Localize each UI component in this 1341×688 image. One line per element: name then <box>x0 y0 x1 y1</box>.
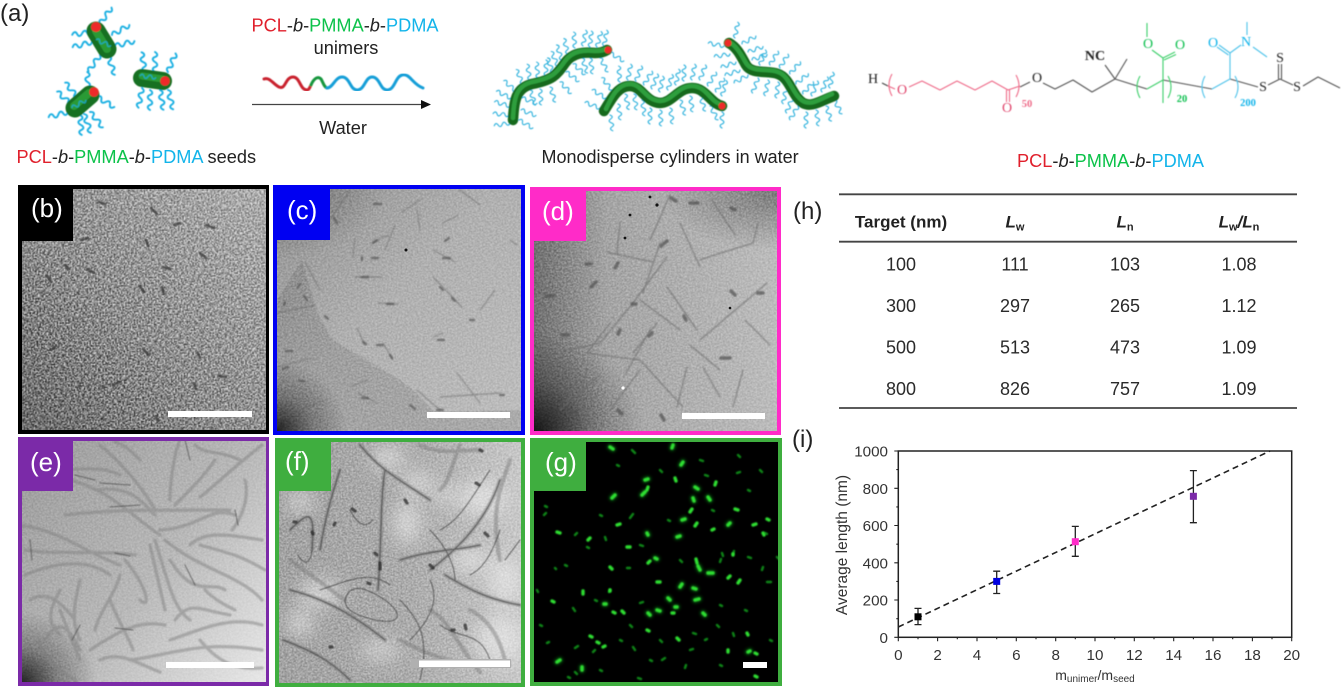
x axis labels: 6 <box>1012 647 1021 664</box>
chemical structure: 20 <box>1177 94 1187 105</box>
y axis labels <box>854 444 888 647</box>
y axis title: Average length (nm) <box>834 475 851 615</box>
table header: Target (nm) <box>855 212 947 232</box>
table header: n <box>1253 222 1260 234</box>
table rows: 265 <box>1110 296 1140 316</box>
text: monodisperse cylinders: Monodisperse cylinders in water <box>542 147 799 167</box>
label tab (g): (g) <box>545 447 577 477</box>
label tab (g) <box>530 438 586 491</box>
table header: /L <box>1237 212 1253 232</box>
chemical structure: NC <box>1085 49 1105 64</box>
icon: unimer chain <box>264 75 423 90</box>
text: polymer name: PCL-b-PMMA-b-PDMA <box>1017 151 1205 171</box>
table rows: 513 <box>1000 338 1030 358</box>
chart: average length vs mass ratio <box>834 444 1300 685</box>
x axis labels <box>894 647 1300 664</box>
x axis labels: 14 <box>1165 647 1182 664</box>
panel: (g) confocal fluorescence image <box>530 438 782 686</box>
chemical structure: O <box>1032 71 1042 86</box>
panel: (b) TEM seeds <box>18 185 269 434</box>
y axis labels: 1000 <box>854 444 888 460</box>
x axis labels: 4 <box>973 647 981 664</box>
panel label (a): (a) <box>0 0 29 27</box>
table rows: 1.09 <box>1221 338 1257 358</box>
table rows: 500 <box>886 338 916 358</box>
table rows: 826 <box>1000 379 1030 399</box>
chemical structure: N <box>1241 35 1251 50</box>
x axis labels: 2 <box>933 647 942 664</box>
table rows: 1.09 <box>1221 379 1257 399</box>
table header: L <box>1116 212 1127 232</box>
y axis labels: 400 <box>863 555 888 572</box>
label tab (d) <box>530 187 586 241</box>
chemical structure: S <box>1259 80 1267 95</box>
chemical structure: 50 <box>1022 99 1032 110</box>
chemical structure: O <box>1002 101 1012 116</box>
label tab (f): (f) <box>285 446 310 476</box>
label tab (b) <box>18 185 73 241</box>
table: lengths and dispersity <box>839 194 1297 408</box>
panel: (c) TEM 100 nm cylinders <box>273 185 525 435</box>
x axis labels: 18 <box>1244 647 1261 664</box>
table rows: 300 <box>886 296 916 316</box>
table rows: 100 <box>886 255 916 275</box>
table rows: 103 <box>1110 255 1140 275</box>
y axis labels: 800 <box>863 481 888 498</box>
x axis title: seed <box>1113 674 1135 685</box>
chemical structure: S <box>1293 80 1301 95</box>
x axis labels: 16 <box>1205 647 1221 664</box>
label tab (c) <box>273 185 330 240</box>
table header: w <box>1228 222 1238 234</box>
label tab (e): (e) <box>30 447 62 477</box>
table header: n <box>1127 222 1134 234</box>
x axis labels: 10 <box>1087 647 1103 664</box>
table header: w <box>1015 222 1025 234</box>
trend line <box>898 451 1270 627</box>
chemical structure: O <box>1208 36 1218 51</box>
x axis labels: 20 <box>1283 647 1300 664</box>
chemical structure: S <box>1276 51 1284 66</box>
scale bar <box>427 412 510 418</box>
table rows: 1.08 <box>1221 255 1257 275</box>
label tab (b): (b) <box>31 193 63 223</box>
x axis labels: 12 <box>1126 647 1143 664</box>
label tab (c): (c) <box>287 195 317 225</box>
scale bar <box>743 662 767 668</box>
x axis labels: 8 <box>1051 647 1060 664</box>
scale bar <box>682 413 765 419</box>
arrow: water <box>252 100 431 109</box>
scale bar <box>168 411 252 417</box>
table rows: 297 <box>1000 296 1030 316</box>
scale bar <box>411 659 511 668</box>
table rows: 800 <box>886 379 916 399</box>
y axis labels: 600 <box>863 518 888 535</box>
table rows: 1.12 <box>1221 296 1257 316</box>
icon: seed micelles <box>48 6 178 135</box>
chemical structure: O <box>1143 37 1153 52</box>
table header: L <box>1006 212 1016 232</box>
chemical structure: 200 <box>1240 98 1256 109</box>
text: seeds label: PCL-b-PMMA-b-PDMA seeds <box>16 147 256 167</box>
scale bar <box>166 662 254 668</box>
table rows: 757 <box>1110 379 1140 399</box>
table rows <box>886 255 1257 399</box>
panel label (i): (i) <box>792 426 813 453</box>
chemical structure: O <box>1175 38 1185 53</box>
x axis labels: 0 <box>894 647 903 664</box>
panel: (d) TEM 300 nm cylinders <box>530 187 781 435</box>
data points <box>914 493 1197 620</box>
y axis labels: 0 <box>880 630 888 647</box>
x axis title: /m <box>1098 667 1113 683</box>
x axis title: unimer <box>1067 674 1098 685</box>
chemical structure: O <box>897 83 907 98</box>
text: unimers label: unimers <box>314 38 378 58</box>
text: unimers label <box>252 16 439 58</box>
label tab (d): (d) <box>542 196 574 226</box>
panel label (h): (h) <box>793 198 822 225</box>
panel: (f) TEM 800 nm cylinders <box>275 438 525 687</box>
x axis title: m <box>1055 667 1067 683</box>
label tab (e) <box>18 437 73 491</box>
icon: monodisperse cylinders <box>493 22 844 131</box>
text: unimers label: PCL-b-PMMA-b-PDMA <box>252 16 439 36</box>
y axis labels: 200 <box>863 592 888 610</box>
error bars <box>914 471 1197 625</box>
table header: L <box>1219 212 1229 232</box>
text: water: Water <box>319 118 367 138</box>
chemical structure <box>868 22 1340 116</box>
panel: (e) TEM 500 nm cylinders <box>18 437 269 686</box>
table header <box>855 212 1260 234</box>
table rows: 473 <box>1110 338 1140 358</box>
chemical structure: H <box>868 72 878 87</box>
table rows: 111 <box>1001 255 1029 275</box>
label tab (f) <box>275 438 331 491</box>
